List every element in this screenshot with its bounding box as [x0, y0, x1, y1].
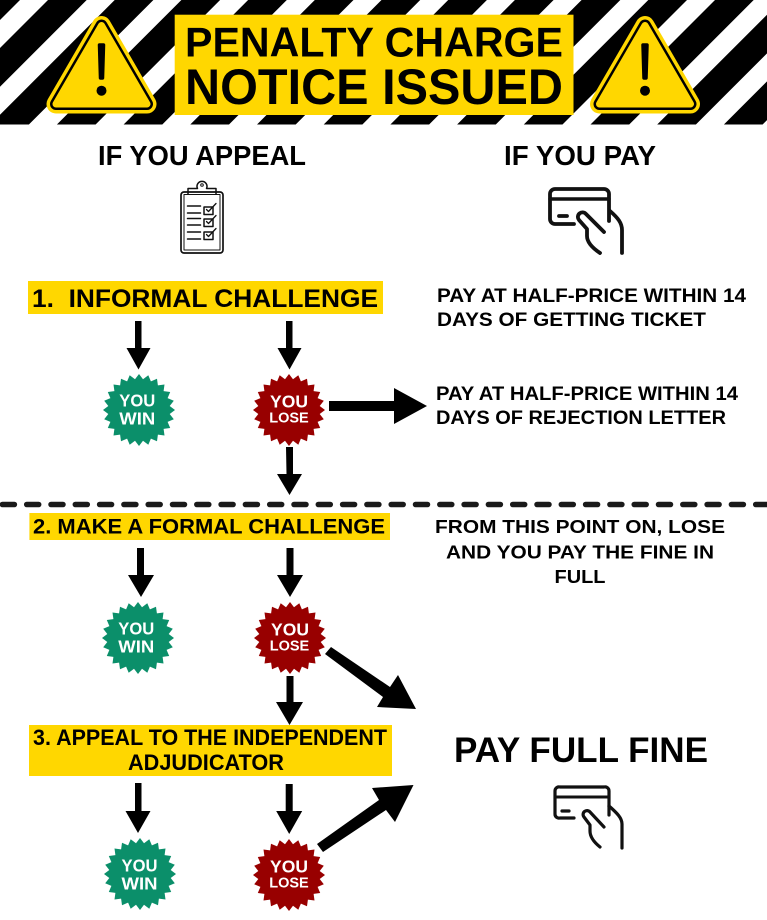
text: pay half price rejection: [436, 384, 738, 429]
text: from this point on: FROM THIS POINT ON, LOSE: [435, 516, 725, 537]
icon: card payment top: [550, 189, 622, 253]
step 2 label: 2. MAKE A FORMAL CHALLENGE: [33, 514, 385, 538]
badge: you win 3: WIN: [122, 873, 158, 893]
text: from this point on: FULL: [554, 566, 606, 587]
arrow: step 2 to lose: [277, 548, 303, 597]
step 1 label: 1. INFORMAL CHALLENGE: [32, 285, 378, 313]
heading: pay full fine: PAY FULL FINE: [454, 731, 708, 770]
title: PENALTY CHARGE: [185, 19, 563, 66]
badge: you lose 3: YOU: [270, 857, 308, 877]
icon: clipboard checklist: [181, 181, 223, 253]
badge: you lose 1: YOU: [270, 392, 308, 412]
heading: if you pay: IF YOU PAY: [504, 140, 656, 171]
badge: you win 2: [102, 602, 174, 674]
icon: warning triangle left: [56, 26, 147, 104]
badge: you win 1: [103, 374, 175, 446]
text: from this point on: [435, 516, 725, 587]
arrow: lose to step 2: [277, 447, 302, 495]
step 3 label: 3. APPEAL TO THE INDEPENDENT: [33, 725, 388, 750]
heading: if you appeal: IF YOU APPEAL: [98, 140, 306, 171]
title: NOTICE ISSUED: [185, 59, 563, 115]
arrow: step 1 to lose: [278, 321, 302, 370]
badge: you lose 2: YOU: [271, 620, 309, 640]
icon: warning triangle right: [600, 26, 690, 104]
text: pay half price ticket: DAYS OF GETTING TICKET: [437, 310, 706, 331]
title: [175, 15, 573, 115]
header banner: [0, 0, 767, 124]
badge: you win 3: YOU: [122, 856, 158, 876]
arrow: step 1 to win: [126, 321, 150, 370]
text: pay half price ticket: PAY AT HALF-PRICE WITHIN 14: [437, 286, 746, 307]
badge: you lose 2: [254, 602, 326, 674]
text: pay half price ticket: [437, 286, 746, 331]
badge: you win 3: [104, 838, 176, 910]
arrow: step 3 to win: [126, 783, 150, 833]
text: from this point on: AND YOU PAY THE FINE IN: [446, 542, 714, 562]
arrow: lose 2 to step 3: [276, 676, 303, 725]
icon: card payment bottom: [555, 787, 622, 848]
badge: you win 1: WIN: [119, 408, 155, 428]
arrow: lose 3 to pay full fine: [317, 785, 414, 852]
arrow: lose to half price: [329, 388, 427, 424]
text: pay half price rejection: DAYS OF REJECTION LETTER: [436, 408, 726, 429]
arrow: lose 2 to pay full fine: [325, 647, 416, 709]
step 3 label: [29, 725, 392, 776]
badge: you win 2: WIN: [118, 636, 154, 656]
badge: you lose 2: LOSE: [270, 638, 310, 654]
badge: you win 2: YOU: [118, 619, 154, 639]
text: pay half price rejection: PAY AT HALF-PRICE WITHIN 14: [436, 384, 738, 405]
badge: you lose 3: [253, 839, 325, 911]
badge: you lose 3: LOSE: [269, 875, 309, 891]
arrow: step 3 to lose: [276, 784, 302, 834]
arrow: step 2 to win: [128, 548, 154, 597]
step 3 label: ADJUDICATOR: [128, 750, 284, 775]
badge: you lose 1: LOSE: [269, 410, 309, 426]
badge: you lose 1: [253, 374, 325, 446]
badge: you win 1: YOU: [119, 391, 155, 411]
